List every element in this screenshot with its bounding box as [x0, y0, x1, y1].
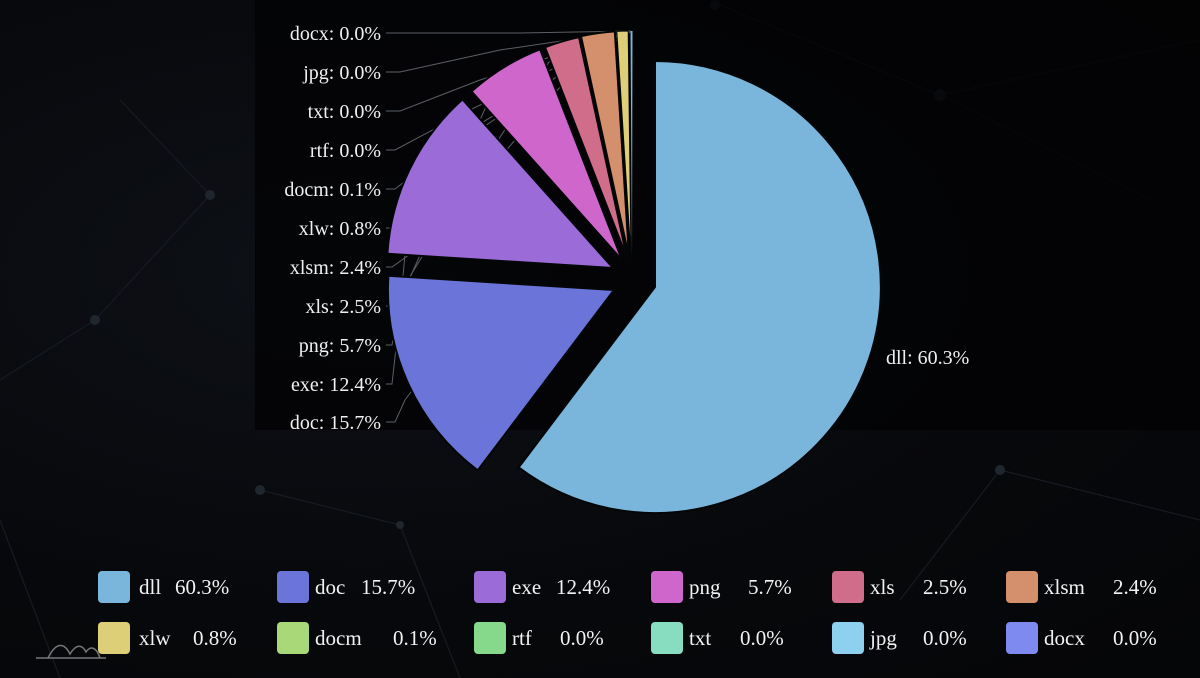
pie labels: docx: 0.0%	[290, 23, 381, 45]
legend row 2	[98, 622, 1157, 654]
logo icon	[36, 644, 106, 659]
legend	[98, 571, 1157, 654]
legend row 2: 0.0%	[740, 626, 784, 650]
legend row 2: 0.1%	[393, 626, 437, 650]
legend row 1: xlsm	[1044, 575, 1085, 599]
legend row 2: docx	[1044, 626, 1085, 650]
pie labels: xlw: 0.8%	[299, 218, 381, 240]
slice: xlw	[617, 31, 631, 257]
slice: xlsm	[581, 31, 629, 257]
legend row 2: rtf	[512, 626, 532, 650]
leader lines	[386, 31, 631, 422]
slice: xls	[545, 37, 627, 258]
legend row 2: docm	[315, 626, 362, 650]
legend row 2: 0.0%	[923, 626, 967, 650]
pie chart	[387, 31, 881, 513]
legend row 1: xls	[870, 575, 895, 599]
slice: doc	[388, 276, 614, 470]
pie labels: png: 5.7%	[299, 335, 381, 357]
legend row 1: doc	[315, 575, 345, 599]
legend row 1: exe	[512, 575, 541, 599]
legend row 2: 0.0%	[1113, 626, 1157, 650]
legend row 2: txt	[689, 626, 711, 650]
legend row 1: 12.4%	[556, 575, 610, 599]
pie labels: doc: 15.7%	[290, 412, 381, 434]
legend row 2: jpg	[870, 626, 897, 650]
legend row 1: 2.4%	[1113, 575, 1157, 599]
legend row 2: 0.0%	[560, 626, 604, 650]
pie labels	[284, 23, 969, 434]
slice: exe	[387, 99, 613, 268]
pie labels: exe: 12.4%	[291, 374, 381, 396]
legend row 1: 15.7%	[361, 575, 415, 599]
pie labels: jpg: 0.0%	[302, 62, 381, 84]
slice: dll	[519, 61, 881, 513]
slice: docm	[630, 31, 632, 257]
legend row 1	[98, 571, 1157, 603]
legend row 2: 0.8%	[193, 626, 237, 650]
pie labels: xls: 2.5%	[305, 296, 381, 318]
legend row 1: 5.7%	[748, 575, 792, 599]
slice: png	[472, 49, 622, 260]
legend row 2: xlw	[139, 626, 170, 650]
legend row 1: dll	[139, 575, 161, 599]
legend row 1: 60.3%	[175, 575, 229, 599]
pie labels: rtf: 0.0%	[310, 140, 381, 162]
pie labels: txt: 0.0%	[308, 101, 381, 123]
legend row 1: png	[689, 575, 720, 599]
legend row 1: 2.5%	[923, 575, 967, 599]
pie labels: docm: 0.1%	[284, 179, 381, 201]
pie labels: xlsm: 2.4%	[290, 257, 381, 279]
pie labels: dll: 60.3%	[886, 347, 969, 369]
